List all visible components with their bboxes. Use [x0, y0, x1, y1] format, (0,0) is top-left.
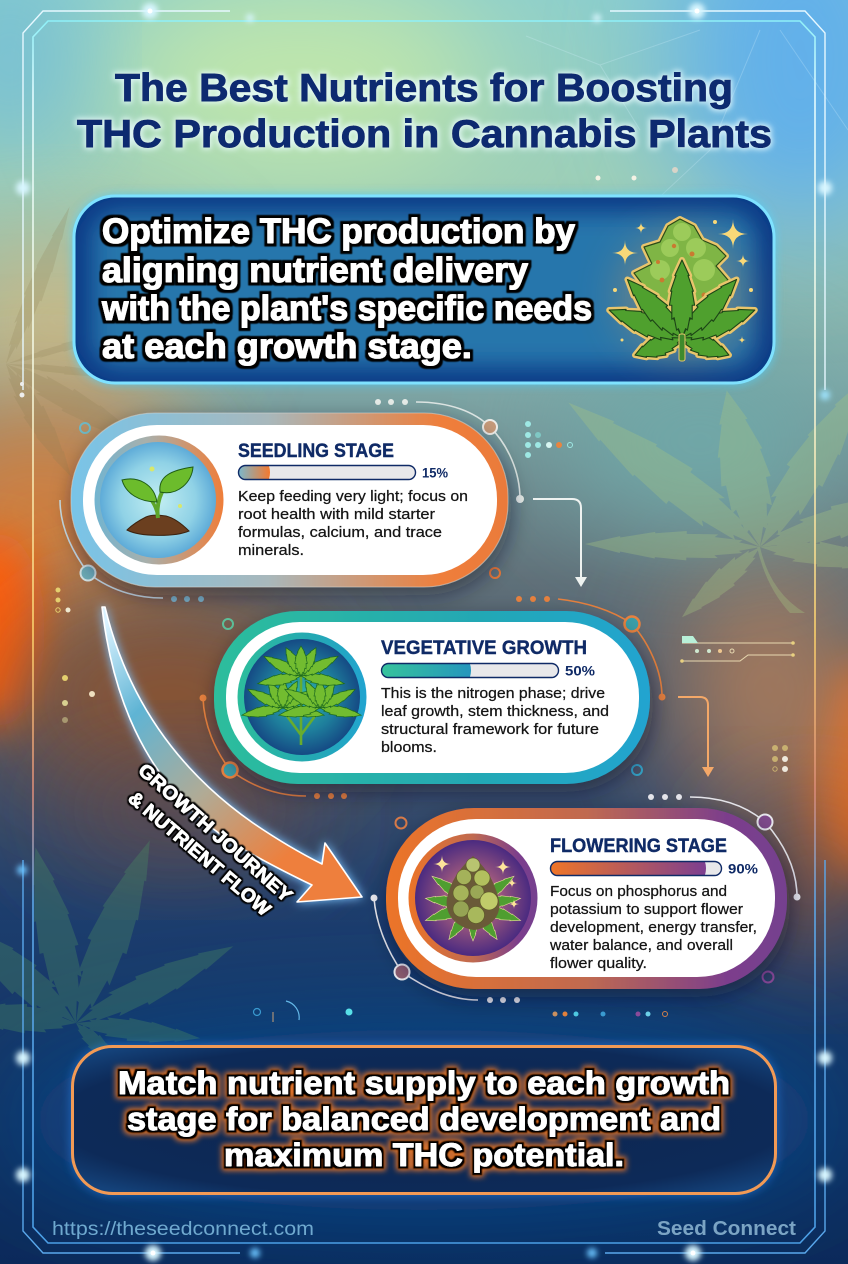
progress bar: 90% — [550, 860, 759, 876]
floating dots — [596, 167, 678, 180]
decoration: circuit lines — [680, 636, 795, 663]
decoration: flowering connector lines and dots — [370, 794, 800, 1003]
panel: intro callout — [73, 195, 775, 384]
background leaf: bottom left — [0, 832, 240, 1071]
closing text: Match nutrient supply to each growth — [118, 1065, 730, 1101]
progress bar: 15%: 15% — [422, 464, 449, 480]
body text — [238, 488, 468, 559]
body text: Focus on phosphorus and — [550, 883, 727, 900]
panel: vegetative growth — [214, 611, 650, 784]
footer url: https://theseedconnect.com — [52, 1219, 314, 1240]
intro text — [101, 212, 592, 366]
arrow: seedling to vegetative — [533, 499, 587, 587]
panel: seedling stage — [71, 413, 508, 587]
background leaf: right — [555, 366, 848, 626]
intro text: aligning nutrient delivery — [102, 251, 529, 290]
decorative network lines — [526, 30, 848, 290]
intro text: Optimize THC production by — [102, 212, 576, 251]
closing text: stage for balanced development and — [127, 1101, 721, 1137]
body text: minerals. — [238, 542, 304, 559]
icon: leafy plant — [238, 632, 366, 762]
progress bar: 50%: 50% — [565, 662, 596, 678]
title: THC Production in Cannabis Plants — [77, 113, 772, 156]
progress bar: 50% — [382, 662, 596, 678]
title — [77, 67, 772, 156]
panel: flowering stage — [386, 808, 787, 989]
footer brand: Seed Connect — [657, 1218, 796, 1240]
intro text: with the plant's specific needs — [101, 289, 592, 328]
icon: cannabis bud with leaf and sparkles — [605, 219, 759, 365]
heading: FLOWERING STAGE — [550, 836, 727, 857]
icon: seedling — [94, 436, 224, 564]
body text: formulas, calcium, and trace — [238, 524, 442, 541]
decoration: lower dots — [254, 1001, 668, 1022]
arrow: vegetative to flowering — [678, 697, 714, 777]
body text: development, energy transfer, — [550, 919, 757, 936]
title: The Best Nutrients for Boosting — [115, 67, 733, 110]
heading: VEGETATIVE GROWTH — [381, 638, 587, 659]
body text: Keep feeding very light; focus on — [238, 488, 468, 505]
body text: leaf growth, stem thickness, and — [381, 703, 609, 720]
panel: closing message — [71, 1045, 777, 1195]
intro text: at each growth stage. — [102, 327, 472, 366]
decoration: left dots — [56, 588, 95, 723]
body text — [381, 685, 609, 756]
arrow: growth journey — [102, 607, 362, 902]
body text: flower quality. — [550, 955, 647, 972]
decoration: seedling connector lines and dots — [60, 399, 524, 602]
body text: root health with mild starter — [238, 506, 435, 523]
progress bar: 15% — [238, 464, 449, 480]
body text — [549, 883, 757, 972]
body text: potassium to support flower — [550, 901, 743, 918]
body text: structural framework for future — [381, 721, 599, 738]
background leaf: upper left — [0, 203, 160, 482]
progress bar: 90%: 90% — [728, 860, 759, 876]
decoration: vegetative connector lines and dots — [200, 596, 666, 799]
arrow label: & NUTRIENT FLOW — [124, 788, 274, 921]
body text: blooms. — [381, 739, 437, 756]
icon: flowering bud — [408, 834, 538, 962]
body text: water balance, and overall — [549, 937, 733, 954]
closing text: maximum THC potential. — [224, 1137, 624, 1173]
arrow label: GROWTH JOURNEY — [134, 760, 296, 907]
heading: SEEDLING STAGE — [238, 441, 394, 462]
dots cluster upper right — [525, 421, 572, 458]
closing text — [118, 1065, 730, 1173]
body text: This is the nitrogen phase; drive — [381, 685, 605, 702]
